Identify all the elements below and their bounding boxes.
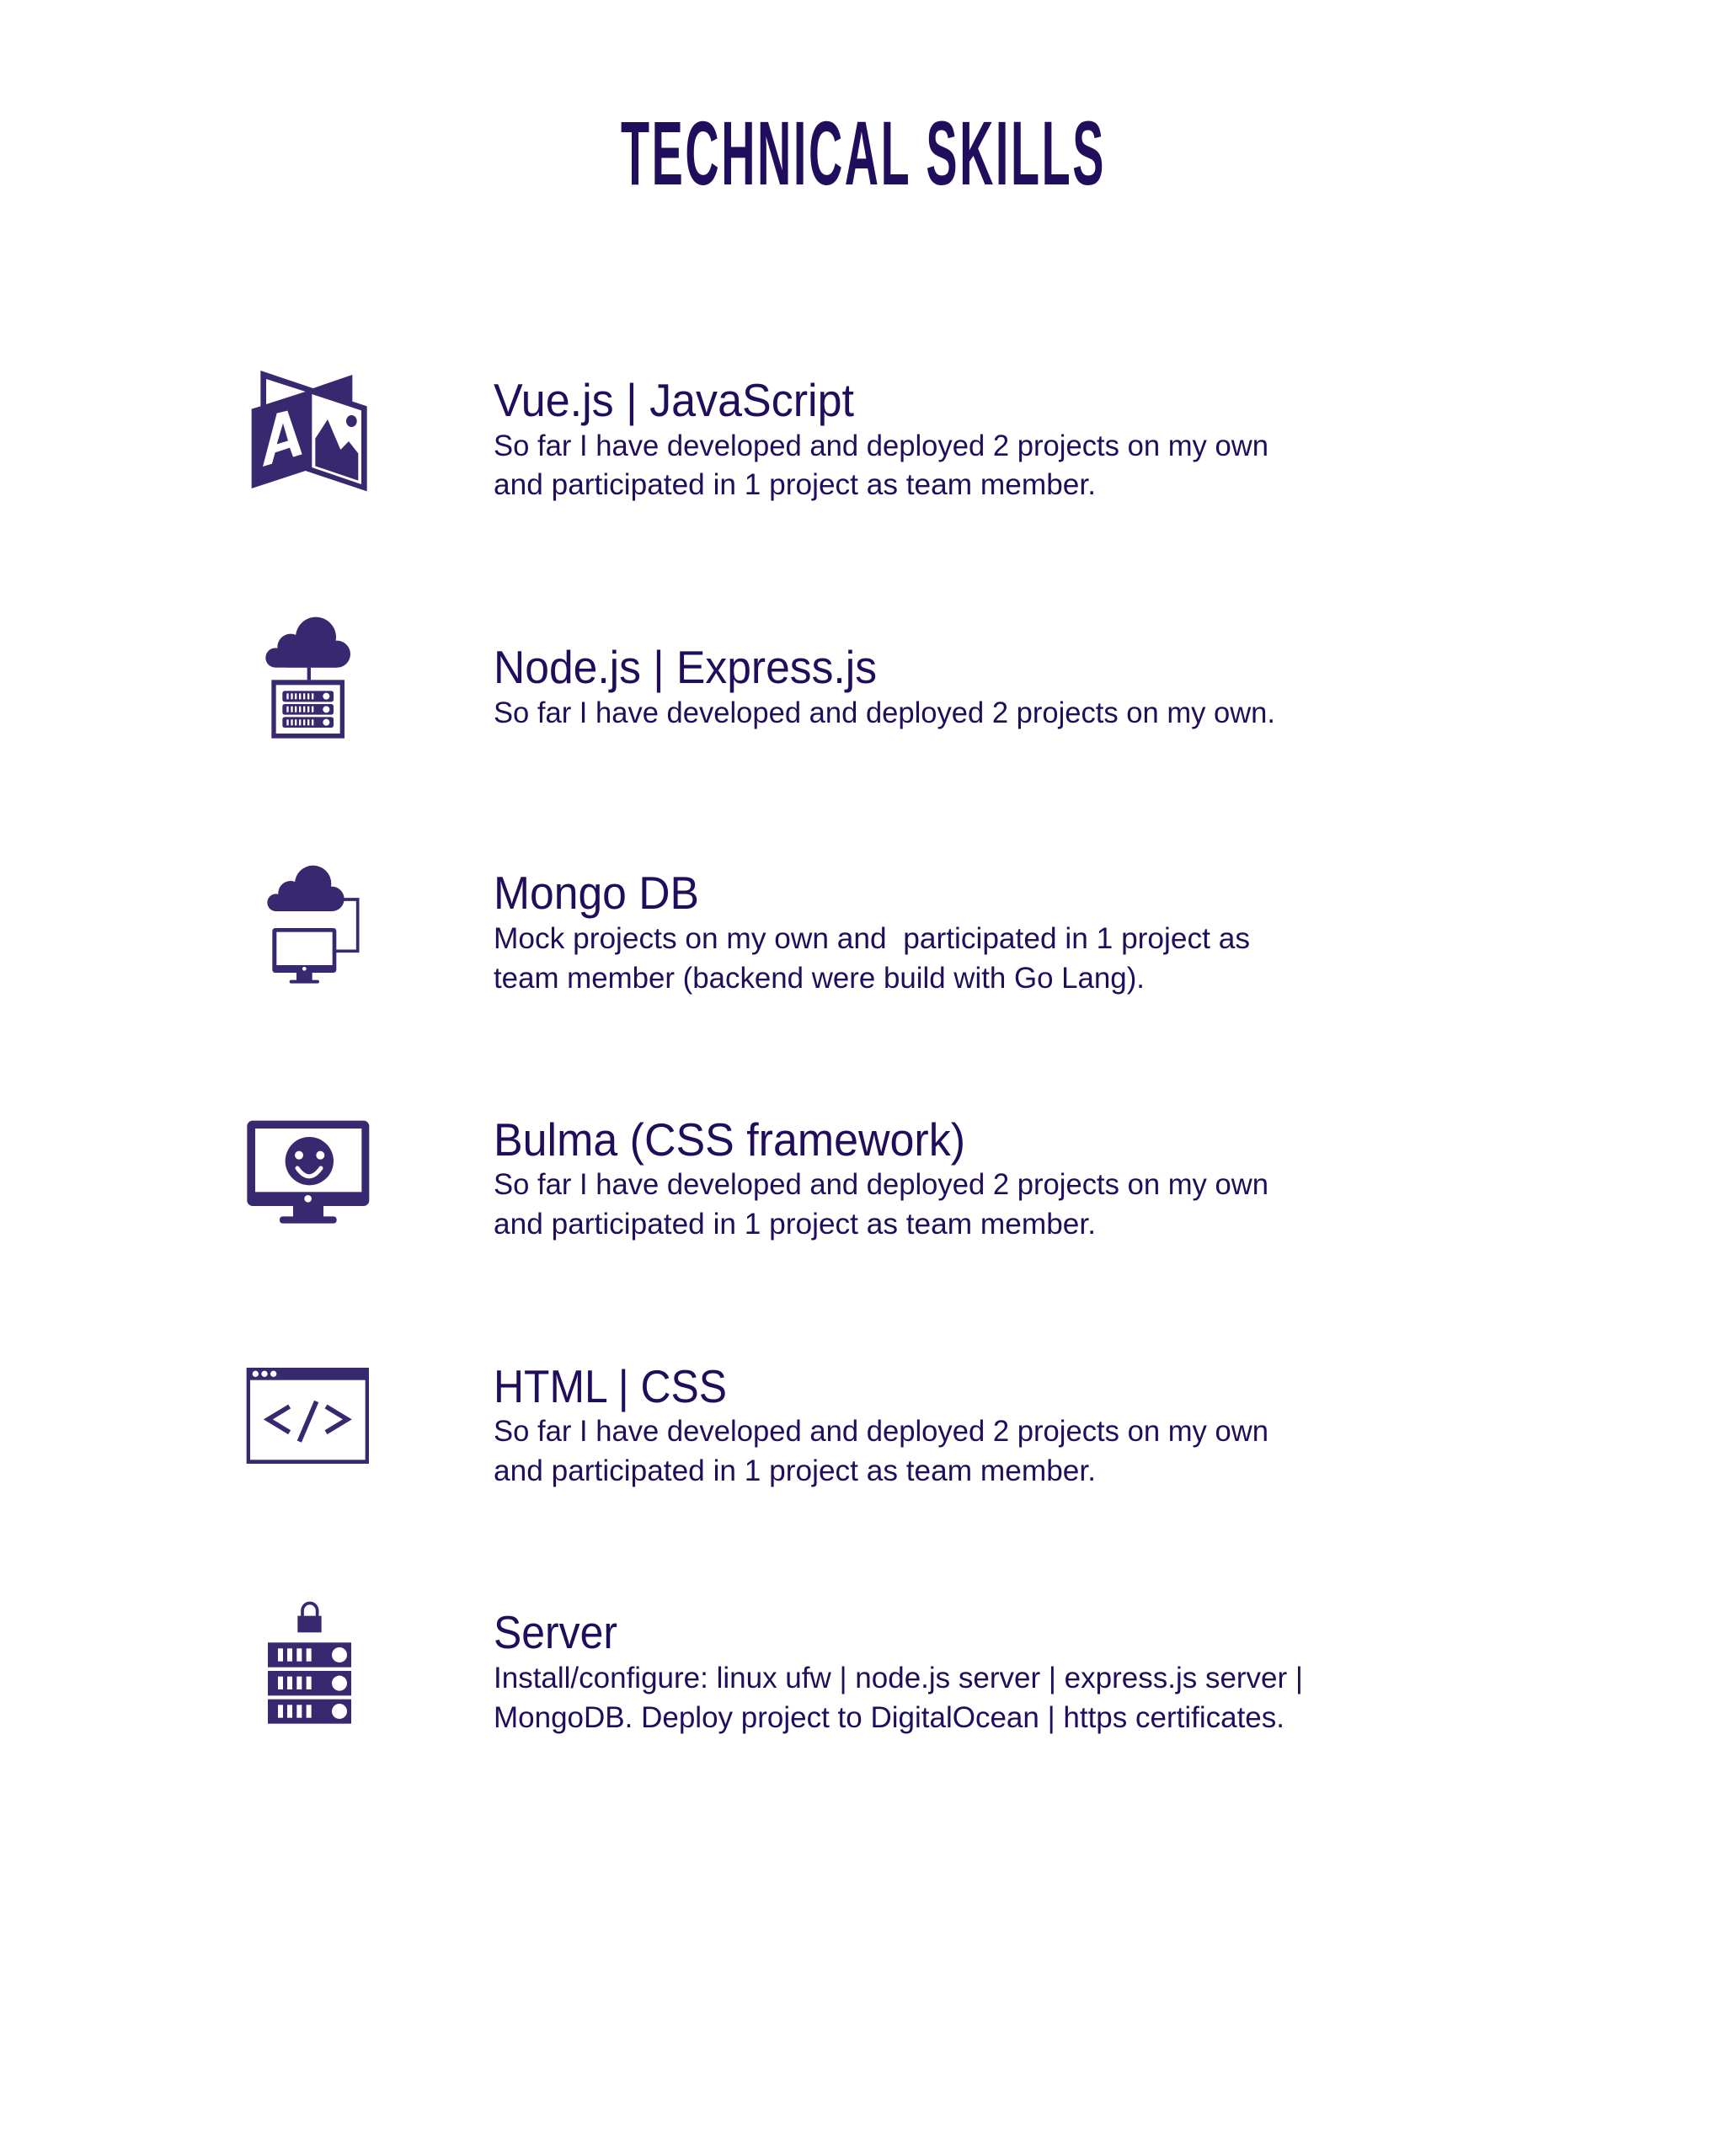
description: So far I have developed and deployed 2 projects on my own. bbox=[494, 696, 1275, 729]
row: Node.js | Express.js bbox=[265, 617, 1275, 739]
description: MongoDB. Deploy project to DigitalOcean | https certificates. bbox=[494, 1701, 1284, 1734]
heading: Vue.js | JavaScript bbox=[494, 374, 854, 426]
heading: HTML | CSS bbox=[494, 1360, 727, 1412]
description: So far I have developed and deployed 2 projects on my own bbox=[494, 1415, 1268, 1448]
description: So far I have developed and deployed 2 projects on my own bbox=[494, 1168, 1268, 1201]
row: Mongo DB bbox=[267, 866, 1250, 995]
icon: cloud connected to server bbox=[265, 617, 350, 739]
row: Vue.js | JavaScript bbox=[252, 371, 1268, 501]
description bbox=[494, 430, 1268, 501]
description: and participated in 1 project as team member. bbox=[494, 1454, 1096, 1487]
description: and participated in 1 project as team member. bbox=[494, 1208, 1096, 1241]
description: Install/configure: linux ufw | node.js server | express.js server | bbox=[494, 1662, 1303, 1694]
description: So far I have developed and deployed 2 projects on my own bbox=[494, 430, 1268, 462]
row: HTML | CSS bbox=[247, 1360, 1268, 1487]
description: team member (backend were build with Go Lang). bbox=[494, 962, 1145, 995]
heading: Bulma (CSS framework) bbox=[494, 1113, 965, 1166]
description: and participated in 1 project as team member. bbox=[494, 468, 1096, 501]
icon: cloud linked to monitor bbox=[267, 866, 358, 984]
description: Mock projects on my own and participated in 1 project as bbox=[494, 922, 1250, 955]
heading: Node.js | Express.js bbox=[494, 641, 877, 693]
description bbox=[494, 1662, 1303, 1734]
description bbox=[494, 922, 1250, 995]
heading: Mongo DB bbox=[494, 867, 699, 919]
icon: open book with letter and picture bbox=[252, 371, 367, 491]
description bbox=[494, 1168, 1268, 1241]
icon: code window bbox=[247, 1368, 369, 1464]
description bbox=[494, 1415, 1268, 1487]
icon: padlock over server rack bbox=[268, 1603, 351, 1724]
row: Server bbox=[268, 1603, 1303, 1734]
row: Bulma bbox=[247, 1113, 1268, 1241]
icon: monitor with smiley bbox=[247, 1121, 369, 1224]
heading: Server bbox=[494, 1606, 617, 1658]
title: TECHNICAL SKILLS bbox=[621, 102, 1106, 204]
